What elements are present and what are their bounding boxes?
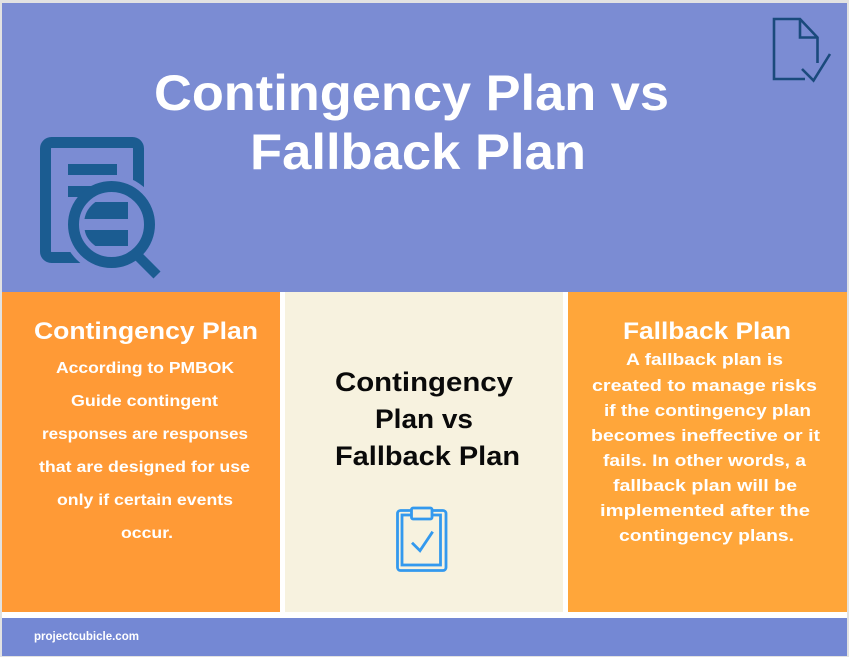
title: Fallback Plan: [250, 124, 586, 180]
heading: comparison: Plan vs: [375, 404, 473, 434]
icon: document with magnifier: [46, 142, 161, 275]
text block: contingency plan description: Guide contingent: [71, 393, 219, 410]
text block: contingency plan description: that are designed for use: [39, 459, 250, 476]
header panel: [2, 3, 847, 292]
text block: fallback plan description: fails. In other words, a: [603, 451, 807, 470]
text block: fallback plan description: [591, 350, 820, 545]
text block: fallback plan description: created to manage risks: [592, 376, 817, 395]
text block: fallback plan description: becomes ineffective or it: [591, 426, 820, 445]
text block: fallback plan description: fallback plan will be: [613, 476, 797, 495]
icon: clipboard with checkmark: [398, 508, 446, 570]
text block: contingency plan description: only if certain events: [57, 492, 233, 509]
heading: contingency plan: Contingency Plan: [34, 318, 258, 345]
text block: fallback plan description: implemented after the: [600, 501, 810, 520]
heading: comparison: [335, 367, 520, 471]
text block: contingency plan description: responses are responses: [42, 426, 248, 443]
icon: document with checkmark: [774, 19, 830, 80]
text block: contingency plan description: [39, 360, 250, 542]
panel: contingency plan: [2, 292, 280, 612]
text block: fallback plan description: A fallback plan is: [626, 350, 783, 369]
footer website: projectcubicle.com: [34, 631, 139, 643]
panel: comparison: [285, 292, 563, 612]
heading: comparison: Fallback Plan: [335, 441, 520, 471]
title: [154, 65, 669, 180]
title: Contingency Plan vs: [154, 65, 669, 121]
heading: fallback plan: Fallback Plan: [623, 318, 791, 345]
text block: contingency plan description: According to PMBOK: [56, 360, 234, 377]
text block: fallback plan description: if the contingency plan: [604, 401, 811, 420]
footer bar: [2, 618, 847, 656]
text block: contingency plan description: occur.: [121, 525, 173, 542]
panel: fallback plan: [568, 292, 847, 612]
heading: comparison: Contingency: [335, 367, 513, 397]
text block: fallback plan description: contingency plans.: [619, 526, 794, 545]
